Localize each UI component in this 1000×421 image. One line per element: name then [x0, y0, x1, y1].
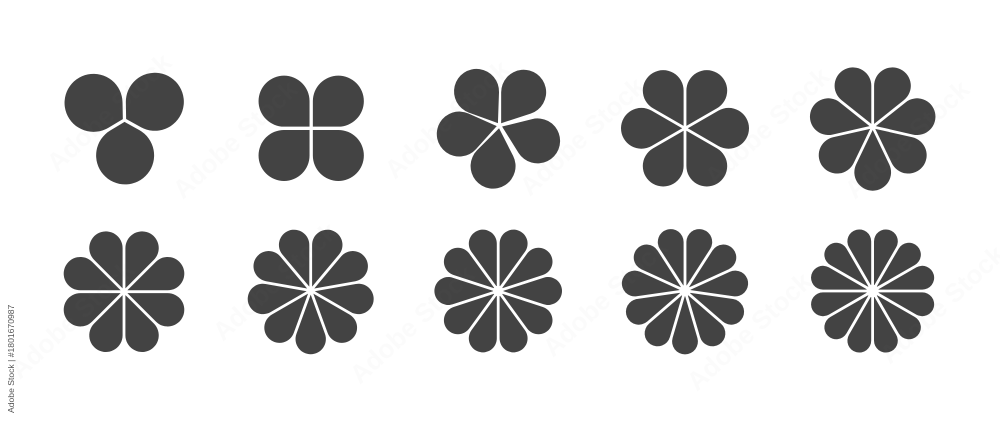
flower: 6 petals	[621, 63, 749, 194]
flower: 8 petals	[59, 226, 189, 357]
stock image credit: Adobe Stock | #1801670987	[6, 304, 16, 413]
flower: 7 petals	[806, 61, 939, 191]
flower: 4 petals	[248, 65, 374, 192]
faint diagonal watermark: Adobe Stock	[537, 232, 674, 362]
faint diagonal watermark: Adobe Stock	[699, 61, 836, 191]
faint diagonal watermark: Adobe Stock	[41, 47, 178, 177]
faint diagonal watermark: Adobe Stock	[4, 254, 141, 384]
flower: 3 petals	[54, 62, 195, 185]
faint diagonal watermark: Adobe Stock	[344, 259, 481, 389]
faint diagonal watermark: Adobe Stock	[681, 266, 818, 396]
faint diagonal watermark: Adobe Stock	[167, 74, 304, 204]
flower: 11 petals	[620, 226, 750, 354]
faint diagonal watermark: Adobe Stock	[514, 71, 651, 201]
flower: 10 petals	[434, 226, 562, 356]
faint diagonal watermark: Adobe Stock	[379, 54, 516, 184]
faint diagonal watermark: Adobe Stock	[839, 74, 976, 204]
faint diagonal watermark: Adobe Stock	[207, 216, 344, 346]
flower: 12 petals	[808, 227, 937, 355]
flower: 9 petals	[245, 225, 376, 354]
flower: 5 petals	[433, 60, 567, 192]
